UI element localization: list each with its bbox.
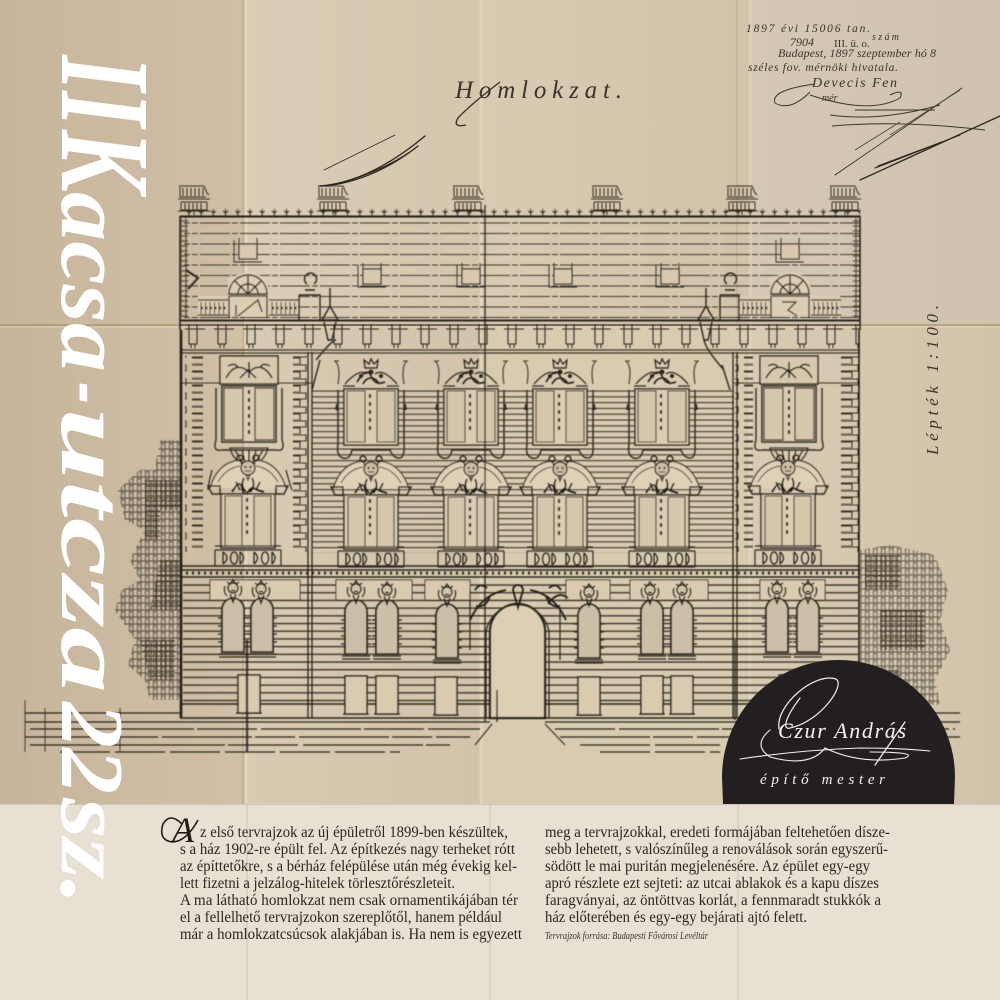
right trees mesh	[860, 545, 950, 705]
left trees mesh	[115, 440, 180, 700]
body text: left column: már a homlokzatcsúcsok alakjában is. Ha nem is egyezett	[180, 926, 523, 943]
ground floor masonry	[180, 580, 860, 718]
dark vertical lines	[181, 205, 859, 752]
lower rectangular windows	[236, 675, 803, 715]
title: K	[34, 129, 176, 198]
handwriting: office stamp note	[746, 23, 985, 150]
roof	[180, 209, 860, 330]
rusticated central wall	[182, 383, 860, 553]
body text: left column: s a ház 1902-re épült fel. Az építkezés nagy terheket rótt	[180, 841, 516, 858]
string course	[180, 566, 860, 577]
title: acsa	[42, 192, 141, 372]
body text: left column: A ma látható homlokzat nem csak ornamentikájában tér	[180, 892, 519, 909]
body text: right column: apró részlete ezt sejteti: az utcai ablakok és a kapu díszes	[545, 875, 879, 892]
body text: right column: sebb lehetett, s valószínűleg a renoválások során egyszerű-	[545, 841, 888, 858]
title: sz.	[42, 797, 141, 905]
handwriting: office stamp note: 1897 évi 15006 tan.	[746, 23, 870, 35]
pen strokes over roof	[320, 88, 1000, 186]
main gate	[470, 585, 568, 718]
left gable	[186, 270, 320, 320]
signature title: építő mester	[760, 772, 885, 788]
body text: left column: z első tervrajzok az új épületről 1899-ben készültek,	[200, 824, 508, 841]
signature name: Czur András	[778, 718, 906, 743]
keystone masks	[224, 580, 817, 606]
handwriting: office stamp note: szám	[872, 32, 899, 43]
source caption: Tervrajzok forrása: Budapesti Fővárosi Levéltár	[545, 931, 709, 942]
handwriting: office stamp note: III. ü. o.	[834, 38, 870, 50]
lanterns	[312, 288, 730, 390]
handwriting: office stamp note: Budapest, 1897 szeptember hó 8	[778, 46, 936, 60]
drop cap	[162, 810, 198, 850]
panel: text background	[0, 804, 1000, 1000]
ground lines	[25, 700, 960, 752]
body text: right column: södött le mai puritán megjelenésére. Az épület egy-egy	[545, 858, 870, 875]
right gable	[720, 272, 841, 320]
upper floor windows	[335, 359, 698, 458]
panel folds	[0, 804, 1000, 1000]
title	[34, 54, 176, 905]
drop cap: A	[170, 810, 195, 850]
chimneys	[178, 186, 861, 215]
first floor windows	[331, 456, 702, 567]
body text: left column: lett fizetni a jelzálog-hitelek törlesztőrészleteit.	[180, 875, 455, 892]
cornice and frieze	[180, 320, 860, 353]
title: II	[34, 54, 176, 130]
body text: left column	[162, 810, 523, 943]
handwriting: office stamp note: 7904	[790, 35, 814, 49]
body text: left column: az építtetőkre, s a bérház felépülése után még évekig kel-	[180, 858, 517, 875]
drawing: facade elevation	[25, 186, 960, 752]
signature badge: dark semicircle	[722, 660, 955, 804]
handwriting: Homlokzat heading	[454, 77, 622, 126]
title: utcza	[42, 408, 141, 693]
body text: right column	[545, 824, 890, 926]
body text: right column: meg a tervrajzokkal, eredeti formájában feltehetően dísze-	[545, 824, 890, 841]
handwriting: scale note: Lépték 1:100.	[923, 305, 942, 456]
handwriting: office stamp note: Devecis Fen	[811, 76, 897, 91]
title: -	[42, 382, 141, 404]
ground floor arched windows	[218, 598, 823, 663]
handwriting: office stamp note: széles fov. mérnöki hivatala.	[748, 62, 898, 74]
body text: right column: faragványai, az öntöttvas korlát, a fennmaradt stukkók a	[545, 892, 881, 909]
title: 22	[42, 700, 141, 794]
body text: left column: el a fellelhető tervrajzokon szereplőtől, hanem például	[180, 909, 502, 926]
signature flourish	[740, 678, 930, 765]
handwriting: Homlokzat heading: Homlokzat.	[454, 77, 622, 104]
handwriting: office stamp note: mér	[822, 93, 838, 104]
left bay windows	[208, 356, 292, 566]
right bay windows	[748, 356, 828, 566]
quoins	[185, 356, 859, 552]
body text: right column: ház előterében és egy-egy bejárati ajtó felett.	[545, 909, 807, 926]
